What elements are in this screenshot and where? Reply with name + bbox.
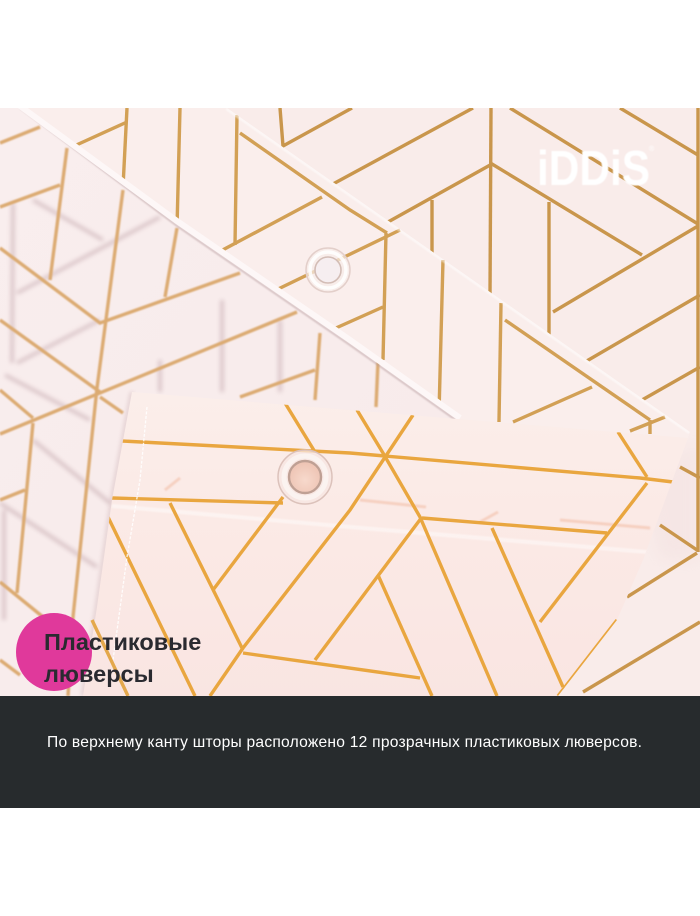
fabric: front folded flap [80, 390, 700, 700]
line through lower left of back layer [92, 620, 128, 696]
caption text: По верхнему канту шторы расположено 12 прозрачных пластиковых люверсов. [47, 734, 642, 751]
hem of the upper curtain edge [20, 106, 460, 423]
flap shadow [83, 392, 132, 696]
heading: люверсы [44, 661, 154, 687]
fabric: middle fold layer [76, 108, 690, 434]
product photo infographic [0, 108, 700, 808]
fabric: top right layer [228, 108, 700, 696]
logo: iDDiS: iDDiS [537, 142, 650, 196]
heading: Пластиковые [44, 629, 201, 655]
fabric: back layer seen through [0, 108, 470, 696]
photo: curtain fabric [0, 106, 700, 700]
logo: iDDiS: ® [649, 145, 655, 153]
caption band [0, 696, 700, 808]
logo: iDDiS [540, 148, 652, 186]
icon: pink blob [16, 613, 92, 691]
grommet: upper [306, 248, 350, 292]
grommet: front [278, 450, 332, 504]
